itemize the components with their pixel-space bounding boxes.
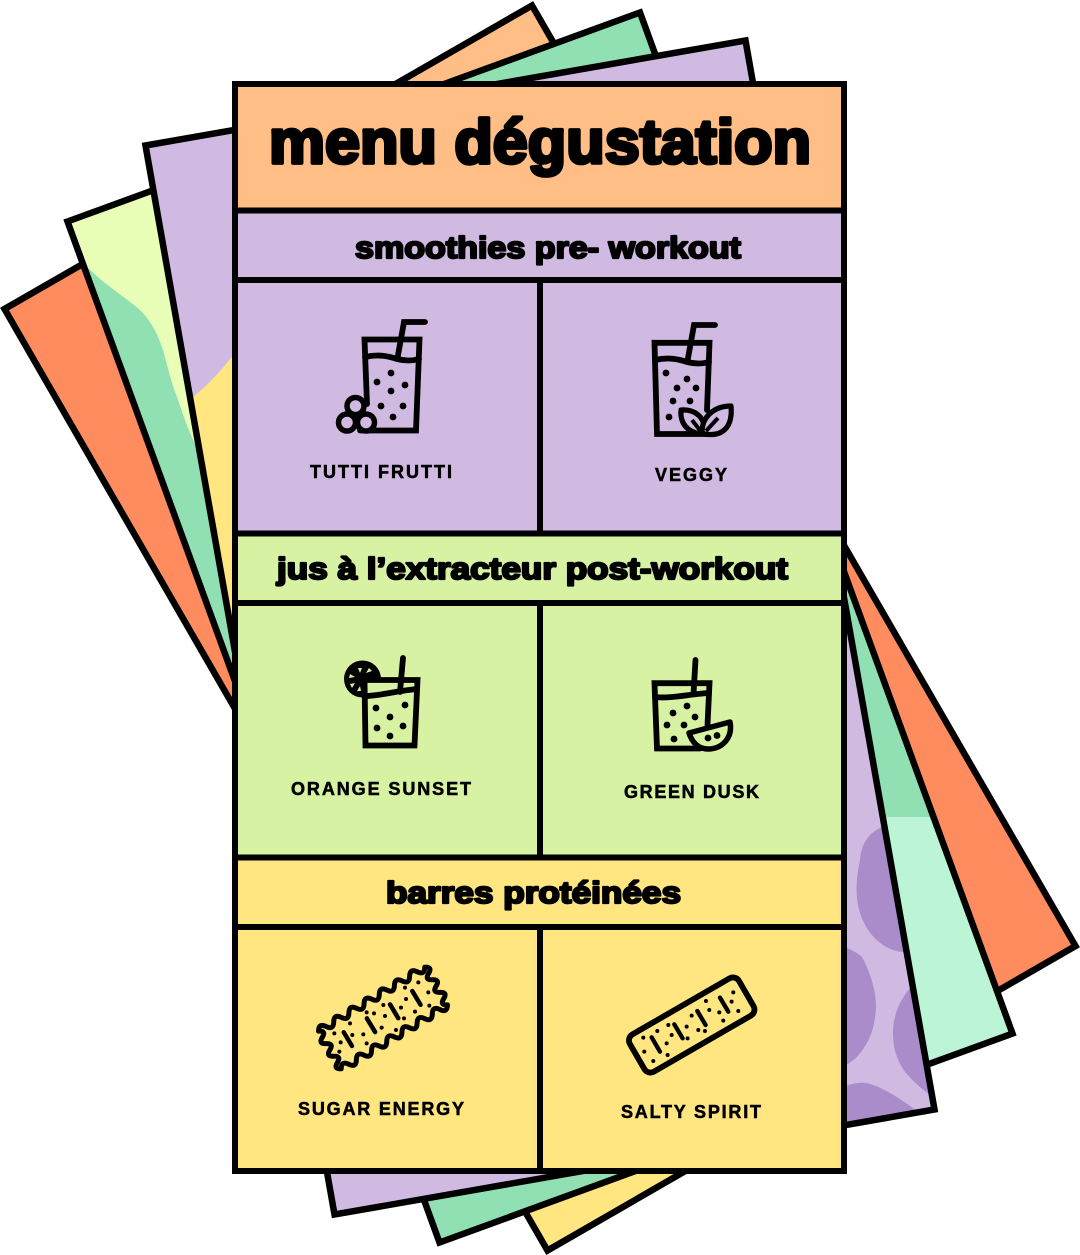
icon: sugar energy scalloped bar [314, 962, 452, 1074]
label: veggy: VEGGY [655, 465, 727, 485]
panel: juices items [235, 604, 844, 858]
icon: salty spirit rounded bar [626, 975, 757, 1075]
label: salty spirit: SALTY SPIRIT [621, 1102, 761, 1122]
label: green dusk: GREEN DUSK [624, 782, 759, 802]
icon: veggy glass with leaves [654, 325, 731, 435]
icon: tutti frutti glass with berries [338, 322, 425, 431]
label: orange sunset: ORANGE SUNSET [291, 779, 471, 799]
label: tutti frutti: TUTTI FRUTTI [310, 462, 452, 482]
title: menu dégustation [269, 108, 811, 177]
heading: protein bars: barres protéinées [386, 875, 681, 910]
icon: green dusk glass with lime wedge [654, 660, 730, 749]
heading: smoothies: smoothies pre- workout [355, 230, 741, 265]
icon: orange sunset glass with citrus slice [344, 658, 418, 746]
front sheet: purple menu rotated 10 degrees with blobs [146, 40, 950, 1214]
panel: protein bars heading [235, 858, 844, 928]
panel: protein bars items [235, 928, 844, 1171]
panel: title header [235, 84, 844, 210]
heading: juices: jus à l’extracteur post-workout [276, 551, 788, 586]
panel: juices heading [235, 534, 844, 604]
label: sugar energy: SUGAR ENERGY [298, 1099, 464, 1119]
panel: smoothies heading [235, 210, 844, 280]
panel: smoothies items [235, 280, 844, 534]
main menu card [235, 84, 844, 1171]
